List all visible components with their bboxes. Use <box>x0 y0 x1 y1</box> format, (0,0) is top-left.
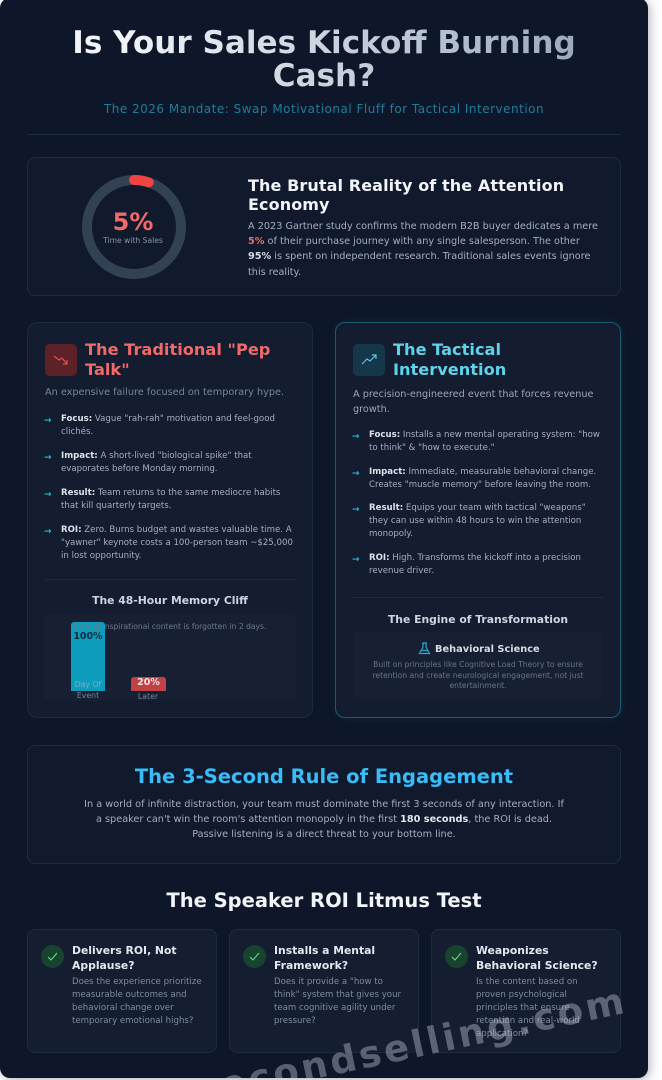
bullet: impact: Impact: A short-lived "biological spike" that <box>61 451 252 461</box>
bullet: result: Result: Team returns to the same mediocre habits <box>61 488 280 498</box>
bullet: result <box>352 503 586 539</box>
donut chart: 5 percent: Time with Sales <box>102 236 163 245</box>
label day of event: Day Of <box>75 680 101 689</box>
panel body text: 95% is spent on independent research. Traditional sales events ignore <box>248 251 590 262</box>
panel: tactical intervention: → <box>352 432 360 442</box>
icon: trending down <box>45 344 77 376</box>
card text: Is the content based on <box>476 977 578 987</box>
heading: Talk" <box>85 360 130 378</box>
heading: Intervention <box>393 360 506 378</box>
bullet: result: they can use within 48 hours to win the attention <box>369 516 581 526</box>
card text: proven psychological <box>476 990 567 1000</box>
bullet: focus <box>352 430 600 453</box>
bullet: roi <box>352 553 581 576</box>
title: Is Your Sales Kickoff Burning <box>72 25 576 61</box>
bullet: focus <box>44 414 275 437</box>
icon: flask <box>418 642 430 654</box>
card text <box>72 977 202 1026</box>
chart heading: The 48-Hour Memory Cliff <box>92 594 248 607</box>
bullet: focus: to think" & "how to execute." <box>369 443 495 453</box>
card text: application? <box>476 1029 528 1039</box>
card title: Behavioral Science? <box>476 959 598 972</box>
card title: Applause? <box>72 959 134 972</box>
heading: The Tactical <box>393 340 501 359</box>
panel heading <box>248 176 564 214</box>
heading: litmus test: The Speaker ROI Litmus Test <box>166 889 482 912</box>
intro text: A precision-engineered event that forces revenue <box>353 389 593 400</box>
bullet: roi: ROI: High. Transforms the kickoff into a precision <box>369 553 581 563</box>
card title: Delivers ROI, Not <box>72 944 177 957</box>
box heading: Behavioral Science <box>435 644 540 654</box>
card text: think" system that gives your <box>274 990 401 1000</box>
bullet: focus: clichés. <box>61 427 93 437</box>
card: behavioral science <box>431 929 621 1053</box>
card text: pressure? <box>274 1016 316 1026</box>
bullet: focus: Focus: Vague "rah-rah" motivation and feel-good <box>61 414 275 424</box>
card text: team cognitive agility under <box>274 1003 395 1013</box>
label day of event: Event <box>77 691 99 700</box>
panel: traditional pep talk <box>27 322 313 718</box>
panel: 3-second rule <box>27 745 621 864</box>
bullet: impact: Creates "muscle memory" before leaving the room. <box>369 480 591 490</box>
card title <box>476 944 598 972</box>
panel: attention economy <box>27 157 621 296</box>
body text <box>84 799 564 840</box>
body text: In a world of infinite distraction, your team must dominate the first 3 seconds of any interaction. If <box>84 799 564 810</box>
panel: traditional pep talk: → <box>44 527 52 537</box>
panel body text: this reality. <box>248 267 301 278</box>
card text: Does it provide a "how to <box>274 977 383 987</box>
card title <box>72 944 177 972</box>
card title <box>274 944 375 972</box>
body text: a speaker can't win the room's attention monopoly in the first 180 seconds, the ROI is dead. <box>96 814 552 825</box>
panel: traditional pep talk: → <box>44 453 52 463</box>
panel: traditional pep talk: → <box>44 490 52 500</box>
panel body text <box>248 221 598 278</box>
subtitle: The 2026 Mandate: Swap Motivational Fluff for Tactical Intervention <box>104 102 544 116</box>
donut chart: 5 percent: 5% <box>113 208 153 236</box>
bullet: roi: ROI: Zero. Burns budget and wastes valuable time. A <box>61 525 292 535</box>
bar chart: memory cliff <box>44 614 296 701</box>
bullet: roi: "yawner" keynote costs a 100-person team ~$25,000 <box>61 538 293 548</box>
intro text <box>353 389 593 415</box>
box: behavioral science <box>353 632 603 699</box>
value 100%: 100% <box>73 631 103 642</box>
donut chart: 5 percent <box>82 175 186 279</box>
bullet: impact: evaporates before Monday morning. <box>61 464 218 474</box>
bullet: focus: Focus: Installs a new mental operating system: "how <box>369 430 600 440</box>
card text: retention and real-world <box>476 1016 580 1026</box>
engine heading: The Engine of Transformation <box>388 613 568 626</box>
bar: day of event <box>71 622 105 691</box>
bullet: roi <box>44 525 293 561</box>
bullet: impact: Impact: Immediate, measurable behavioral change. <box>369 466 596 476</box>
label day of event <box>75 680 102 700</box>
bullet: result: monopoly. <box>369 529 413 539</box>
bullet: result: that kill quarterly targets. <box>61 501 172 511</box>
title <box>27 27 621 92</box>
heading <box>393 340 506 378</box>
card text: measurable outcomes and <box>72 990 187 1000</box>
bullet: impact <box>352 466 596 490</box>
chart caption: 80% of inspirational content is forgotten in 2 days. <box>74 622 266 631</box>
icon: trending up <box>353 344 385 376</box>
heading: The Traditional "Pep <box>85 340 270 359</box>
box text: Built on principles like Cognitive Load Theory to ensure <box>373 660 583 669</box>
heading: The 3-Second Rule of Engagement <box>135 765 513 788</box>
panel: tactical intervention <box>335 322 621 718</box>
card text <box>476 977 580 1039</box>
intro text: An expensive failure focused on temporary hype. <box>45 387 284 398</box>
card text <box>274 977 401 1026</box>
panel: tactical intervention: → <box>352 468 360 478</box>
box text: retention and create neurological engagement, not just <box>372 671 584 680</box>
card: delivers roi <box>27 929 217 1053</box>
heading <box>85 340 270 378</box>
title: Cash? <box>273 58 375 94</box>
card text: Does the experience prioritize <box>72 977 202 987</box>
card title: Installs a Mental <box>274 944 375 957</box>
bullet: result: Result: Equips your team with tactical "weapons" <box>369 503 586 513</box>
panel: tactical intervention: → <box>352 505 360 515</box>
icon: check <box>41 945 64 968</box>
bullet: roi: revenue driver. <box>369 566 434 576</box>
bar: later <box>131 677 166 691</box>
card text: temporary emotional highs? <box>72 1016 193 1026</box>
bullet: impact <box>44 451 252 474</box>
card text: behavioral change over <box>72 1003 174 1013</box>
panel body text: A 2023 Gartner study confirms the modern B2B buyer dedicates a mere <box>248 221 598 232</box>
card title: Framework? <box>274 959 348 972</box>
bullet: result <box>44 488 280 511</box>
intro text: growth. <box>353 404 390 415</box>
panel heading: Economy <box>248 195 330 214</box>
card text: principles that ensure <box>476 1003 570 1013</box>
body text: Passive listening is a direct threat to your bottom line. <box>192 829 456 840</box>
box text <box>372 660 584 690</box>
label later: Later <box>138 692 158 701</box>
box text: entertainment. <box>449 681 507 690</box>
icon: check <box>243 945 266 968</box>
bullet: roi: in lost opportunity. <box>61 551 141 561</box>
icon: check <box>445 945 468 968</box>
panel: traditional pep talk: → <box>44 416 52 426</box>
card: mental framework <box>229 929 419 1053</box>
card title: Weaponizes <box>476 944 549 957</box>
panel: tactical intervention: → <box>352 555 360 565</box>
panel heading: The Brutal Reality of the Attention <box>248 176 564 194</box>
panel body text: 5% of their purchase journey with any single salesperson. The other <box>248 236 580 247</box>
value 20%: 20% <box>137 677 160 688</box>
